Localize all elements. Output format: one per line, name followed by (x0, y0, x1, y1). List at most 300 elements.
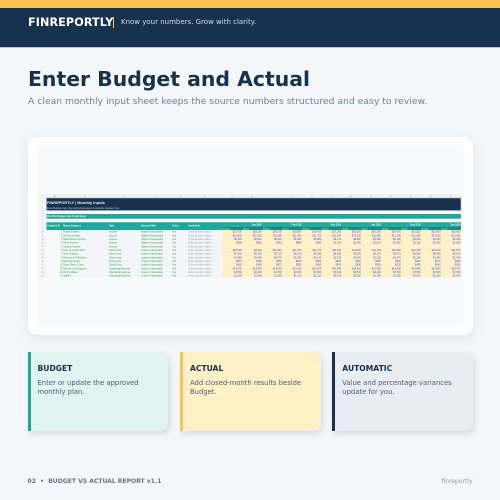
monthly values: $11,270 (312, 249, 322, 252)
monthly values: $1,200 (314, 275, 322, 278)
table labels: Lower is favourable (141, 271, 163, 274)
monthly values: $1,980 (234, 256, 242, 259)
monthly values: $14,070 (451, 267, 461, 270)
monthly values: $10,800 (233, 234, 242, 237)
budget text: monthly plan. (38, 388, 84, 396)
table labels: Enter positive values (188, 245, 212, 248)
monthly values: $860 (296, 260, 302, 263)
sheet banner (46, 198, 461, 210)
table labels: Income (109, 245, 118, 248)
table labels: Enter positive values (188, 256, 212, 259)
monthly values: $4,900 (234, 253, 242, 256)
monthly values: $2,230 (373, 256, 381, 259)
monthly values: $6,230 (453, 238, 461, 241)
monthly values: $970 (435, 260, 441, 263)
table labels: Yes (172, 249, 177, 252)
monthly values: $1,200 (433, 275, 441, 278)
table labels: Direct Cost (109, 264, 122, 267)
table header: Variance Rule (141, 226, 157, 228)
column header strip: O (390, 196, 392, 198)
monthly values: $6,430 (413, 238, 421, 241)
table labels: 8 (61, 256, 63, 259)
monthly values: $5,580 (294, 238, 302, 241)
table labels: Product Sales (63, 231, 79, 234)
monthly values: $12,900 (431, 234, 441, 237)
table labels: Enter positive values (188, 253, 212, 256)
monthly values: $1,200 (393, 275, 401, 278)
table labels: 7 (61, 253, 63, 256)
table header: Actual (442, 227, 448, 230)
monthly values: $520 (395, 264, 401, 267)
table labels: Cost of Goods Sold (63, 249, 85, 252)
column header strip: C (124, 196, 126, 198)
budget text: Enter or update the approved (38, 378, 139, 386)
monthly values: $14,500 (233, 267, 242, 270)
monthly values: $2,160 (314, 256, 322, 259)
column header strip: K (311, 196, 313, 198)
monthly values: $3,500 (314, 271, 322, 274)
table labels: Lower is favourable (141, 275, 163, 278)
row number gutter: 7 (42, 228, 43, 230)
table labels: Lower is favourable (141, 249, 163, 252)
monthly values: $980 (316, 242, 322, 245)
monthly values: $5,400 (234, 238, 242, 241)
table labels: Enter positive values (188, 234, 212, 237)
monthly values: $6,170 (334, 238, 342, 241)
monthly values: $14,500 (431, 267, 441, 270)
footer brand: finreportly (441, 478, 472, 485)
table labels: Yes (172, 275, 177, 278)
table header: Budget (302, 227, 310, 230)
column header strip: A (54, 195, 56, 198)
monthly values: $11,380 (273, 234, 282, 237)
table labels: Enter positive values (188, 275, 212, 278)
monthly values: $10,810 (273, 249, 282, 252)
table header: Report Category (63, 225, 82, 228)
monthly values: $14,360 (292, 267, 302, 270)
row number gutter: 9 (42, 235, 43, 237)
row number gutter: 15 (41, 257, 44, 259)
monthly values: $5,100 (254, 253, 262, 256)
row number gutter: 16 (41, 261, 44, 263)
table labels: Yes (172, 238, 177, 241)
monthly values: $30,000 (273, 231, 282, 234)
monthly values: $5,510 (254, 238, 262, 241)
table body background (46, 230, 461, 278)
table labels: 11 (60, 267, 63, 270)
monthly values: $470 (336, 264, 342, 267)
monthly values: $11,800 (392, 249, 401, 252)
table labels: Yes (172, 242, 177, 245)
monthly values: $980 (296, 242, 302, 245)
monthly values: $11,200 (293, 249, 302, 252)
monthly values: $5,880 (314, 238, 322, 241)
sheet banner: FINREPORTLY | Monthly Inputs (47, 200, 105, 205)
monthly values: $500 (355, 264, 362, 267)
monthly values: $2,070 (274, 256, 282, 259)
table labels: 1 (61, 231, 63, 234)
table labels: Higher is favourable (141, 245, 164, 248)
table labels: Operating Expense (109, 275, 131, 278)
monthly values: $1,190 (373, 275, 381, 278)
monthly values: $28,190 (253, 231, 262, 234)
monthly values: $850 (276, 260, 282, 263)
monthly values: $2,420 (453, 256, 461, 259)
actual heading: ACTUAL (190, 364, 223, 372)
table header: Budget (342, 227, 349, 230)
panel: spreadsheet card (28, 137, 473, 335)
table labels: 4 (61, 242, 63, 245)
table labels: Enter positive values (188, 267, 212, 270)
monthly values: $3,500 (433, 271, 441, 274)
monthly values: $1,360 (453, 275, 461, 278)
monthly values: $14,500 (273, 267, 282, 270)
table labels: Yes (172, 253, 177, 256)
monthly values: $2,200 (353, 256, 362, 259)
monthly values: $1,300 (254, 275, 262, 278)
monthly values: $31,520 (412, 231, 421, 234)
logo divider (112, 17, 115, 28)
table labels: Higher is favourable (141, 242, 164, 245)
monthly values: $3,500 (393, 271, 401, 274)
column header strip: I (272, 196, 273, 198)
table labels: Income (109, 231, 118, 234)
table labels: Operating Expense (109, 271, 131, 274)
monthly values: $1,050 (453, 242, 461, 245)
monthly values: $1,200 (353, 275, 362, 278)
column header strip: F (204, 196, 206, 198)
monthly values: $900 (236, 242, 242, 245)
monthly values: $890 (375, 260, 381, 263)
table header: Actual (402, 227, 408, 230)
monthly values: $470 (276, 264, 282, 267)
row number gutter: 12 (41, 246, 44, 248)
table header: Apr 2026 (371, 223, 382, 226)
monthly values: $5,600 (274, 238, 282, 241)
row number gutter: 20 (41, 276, 44, 278)
monthly values: $6,380 (433, 238, 441, 241)
monthly values: $12,000 (352, 234, 362, 237)
monthly values: $810 (236, 260, 242, 263)
monthly values: $2,360 (433, 256, 441, 259)
actual text: Budget. (190, 388, 217, 396)
monthly values: $1,200 (234, 275, 242, 278)
monthly values: $1,950 (294, 256, 302, 259)
row number gutter: 1 (42, 201, 43, 203)
row number gutter: 14 (41, 254, 44, 256)
table labels: Yes (172, 260, 177, 263)
monthly values: $540 (435, 264, 441, 267)
tagline: Know your numbers. Grow with clarity. (121, 18, 256, 26)
monthly values: $3,320 (254, 271, 262, 274)
monthly values: $930 (395, 260, 401, 263)
monthly values: $3,500 (353, 271, 362, 274)
table labels: Lower is favourable (141, 260, 163, 263)
monthly values: $12,430 (412, 249, 421, 252)
table header: Category ID (47, 225, 60, 228)
table labels: Yes (172, 264, 177, 267)
row number gutter: 5 (42, 220, 43, 222)
panel: budget (28, 352, 168, 430)
table labels: Payroll & Contractors (63, 267, 87, 270)
monthly values: $5,170 (373, 253, 381, 256)
table header: Actual (243, 227, 249, 230)
monthly values: $1,110 (413, 242, 421, 245)
table labels: Custom Income (63, 245, 81, 248)
monthly values: $9,920 (254, 249, 262, 252)
monthly values: $1,010 (373, 242, 381, 245)
column header strip: J (292, 196, 293, 198)
section bar (46, 214, 461, 219)
table labels: Enter positive values (188, 231, 212, 234)
table labels: Merchant Fees (63, 260, 80, 263)
row number gutter: 4 (42, 216, 43, 218)
monthly values: $15,080 (372, 267, 381, 270)
monthly values: $30,000 (352, 231, 362, 234)
monthly values: $11,750 (312, 234, 322, 237)
monthly values: $430 (256, 264, 262, 267)
table labels: Income (109, 238, 118, 241)
monthly values: $10,300 (253, 234, 262, 237)
table labels: 12 (60, 271, 63, 274)
table labels: Enter positive values (188, 271, 212, 274)
table labels: Direct Cost (109, 256, 122, 259)
table labels: Yes (172, 231, 177, 234)
table labels: Yes (172, 271, 177, 274)
monthly values: $5,010 (294, 253, 302, 256)
table header: Actual (283, 227, 289, 230)
monthly values: $1,310 (334, 275, 342, 278)
row number gutter (39, 198, 46, 278)
header band (0, 8, 500, 48)
monthly values: $12,960 (412, 234, 421, 237)
monthly values: $880 (316, 260, 322, 263)
monthly values: $3,400 (373, 271, 381, 274)
monthly values: $2,060 (254, 256, 262, 259)
table labels: 13 (60, 275, 63, 278)
monthly values: $12,380 (392, 234, 401, 237)
monthly values: $2,140 (413, 256, 421, 259)
monthly values: $27,000 (233, 231, 242, 234)
monthly values: $5,930 (373, 238, 381, 241)
table header: Actual (362, 227, 368, 230)
monthly values: $12,020 (431, 249, 441, 252)
monthly values: $30,080 (451, 231, 461, 234)
table labels: Higher is favourable (141, 234, 164, 237)
table labels: Direct Cost (109, 253, 122, 256)
monthly values: $5,880 (413, 253, 421, 256)
monthly values: $29,380 (372, 231, 381, 234)
automatic heading: AUTOMATIC (342, 364, 392, 372)
table labels: Yes (172, 267, 177, 270)
table labels: Lower is favourable (141, 253, 163, 256)
table labels: Utilities (63, 275, 72, 278)
monthly values: $14,640 (332, 267, 342, 270)
monthly values: $5,170 (274, 253, 282, 256)
logo: FINREPORTLY (28, 16, 113, 28)
monthly values: $29,050 (292, 231, 302, 234)
column header strip: R (450, 196, 452, 198)
row number gutter: 18 (41, 268, 44, 270)
row number gutter: 10 (41, 239, 44, 241)
monthly values: $27,300 (332, 231, 342, 234)
monthly values: $3,500 (274, 271, 282, 274)
table header: Budget (422, 227, 429, 230)
monthly values: $490 (415, 264, 421, 267)
actual text (190, 378, 301, 396)
table labels: Enter positive values (188, 242, 212, 245)
monthly values: $3,350 (453, 271, 461, 274)
title: Enter Budget and Actual (28, 66, 310, 90)
row number gutter: 2 (42, 208, 43, 210)
column header strip: P (410, 196, 412, 198)
monthly values (233, 231, 461, 278)
column header strip (39, 194, 461, 198)
monthly values: $450 (236, 264, 242, 267)
subtitle: A clean monthly input sheet keeps the source numbers structured and easy to review. (28, 96, 427, 106)
monthly values: $11,960 (293, 234, 302, 237)
table labels: Higher is favourable (141, 238, 164, 241)
table header: Actual (322, 227, 329, 230)
automatic text: update for you. (342, 388, 395, 396)
table labels: Lower is favourable (141, 267, 163, 270)
table header: Type (109, 226, 115, 228)
footer label: 02 • BUDGET VS ACTUAL REPORT v1.1 (28, 478, 161, 485)
automatic text (342, 378, 452, 396)
monthly values: $6,000 (353, 238, 362, 241)
monthly values: $1,080 (433, 242, 441, 245)
table labels: 3 (61, 238, 63, 241)
table labels: Operating Expense (109, 267, 131, 270)
monthly values: $10,500 (233, 249, 242, 252)
table labels: Rent & Rates (63, 271, 79, 274)
table labels: Enter positive values (188, 260, 212, 263)
table labels: Direct Cost (109, 249, 122, 252)
monthly values: $1,260 (274, 275, 282, 278)
top accent bar (0, 0, 500, 8)
monthly values: $11,150 (372, 249, 381, 252)
monthly values: $940 (276, 242, 282, 245)
monthly values: $900 (336, 260, 342, 263)
monthly values: $960 (455, 260, 461, 263)
monthly values: $1,020 (334, 242, 342, 245)
table header: May 2026 (410, 224, 421, 226)
column header strip: Q (430, 196, 432, 198)
table labels: 10 (60, 264, 63, 267)
column header strip: H (251, 196, 253, 198)
table header: Jan 2026 (252, 224, 262, 226)
table labels: Service Income (63, 234, 81, 237)
monthly values: $2,270 (393, 256, 401, 259)
row number gutter: 6 (42, 224, 43, 226)
monthly values: $11,570 (452, 249, 461, 252)
monthly values: $780 (256, 260, 262, 263)
monthly values: $14,500 (312, 267, 322, 270)
column header strip: L (331, 196, 333, 198)
row number gutter: 17 (41, 264, 44, 266)
section bar: Monthly Budget and Actual Input (47, 215, 86, 218)
monthly values: $11,680 (372, 234, 381, 237)
monthly values: $490 (316, 264, 322, 267)
monthly values: $900 (355, 260, 362, 263)
table labels: Enter positive values (188, 264, 212, 267)
table labels: 9 (61, 260, 63, 263)
sheet banner: Enter Budget once, then add Actual values if using the manual route (47, 207, 120, 210)
row number gutter: 3 (42, 212, 43, 214)
actual text: Add closed-month results beside (190, 378, 301, 386)
monthly values: $32,000 (431, 231, 441, 234)
monthly values: $2,120 (334, 256, 342, 259)
row number gutter: 8 (42, 232, 43, 234)
column header strip: B (84, 196, 86, 198)
monthly values: $560 (455, 264, 461, 267)
monthly values: $5,670 (393, 253, 401, 256)
table labels: 2 (61, 234, 63, 237)
panel: automatic (332, 352, 473, 430)
table labels: Delivery & Fulfilment (63, 256, 86, 259)
monthly values: $13,190 (451, 234, 461, 237)
monthly values: $14,500 (352, 267, 362, 270)
monthly values: $28,000 (312, 231, 322, 234)
monthly values: $14,500 (392, 267, 401, 270)
column header strip: M (350, 196, 352, 198)
monthly values: $5,940 (433, 253, 441, 256)
budget heading: BUDGET (38, 364, 72, 372)
monthly values: $1,210 (294, 275, 302, 278)
monthly values: $3,610 (334, 271, 342, 274)
monthly values: $3,500 (294, 271, 302, 274)
column header strip: G (231, 196, 233, 198)
monthly values: $5,390 (314, 253, 322, 256)
monthly values: $3,680 (413, 271, 421, 274)
table labels: Higher is favourable (141, 231, 164, 234)
monthly values: $860 (256, 242, 262, 245)
table labels: Other Direct Costs (63, 264, 84, 267)
automatic text: Value and percentage variances (342, 378, 452, 386)
table header: Input Note (188, 225, 201, 228)
monthly values: $12,400 (332, 234, 342, 237)
table labels: 6 (61, 249, 63, 252)
row number gutter: 13 (41, 250, 44, 252)
monthly values: $5,660 (334, 253, 342, 256)
table labels: Enter positive values (188, 249, 212, 252)
table labels: Income (109, 234, 118, 237)
column header strip: N (370, 196, 372, 198)
table header: Budget (223, 227, 230, 230)
table header: Budget (263, 227, 270, 230)
monthly values: $30,000 (392, 231, 401, 234)
monthly values: $1,000 (353, 242, 362, 245)
table header: Budget (382, 227, 389, 230)
panel: actual (180, 352, 320, 430)
table header (46, 222, 461, 230)
column header strip: E (180, 196, 182, 198)
table labels (60, 231, 212, 278)
column header strip: D (155, 196, 157, 198)
table labels: 5 (61, 245, 63, 248)
monthly values: $6,180 (393, 238, 401, 241)
monthly values: $5,500 (353, 253, 362, 256)
monthly values: $1,050 (393, 242, 401, 245)
table labels: Other Income (63, 242, 79, 245)
row number gutter: 11 (42, 242, 43, 244)
table labels: Subscription Income (63, 238, 86, 241)
table labels: Yes (172, 256, 177, 259)
table header: Mar 2026 (331, 224, 342, 226)
monthly values: $1,300 (413, 275, 421, 278)
monthly values: $500 (296, 264, 302, 267)
monthly values: $3,500 (234, 271, 242, 274)
